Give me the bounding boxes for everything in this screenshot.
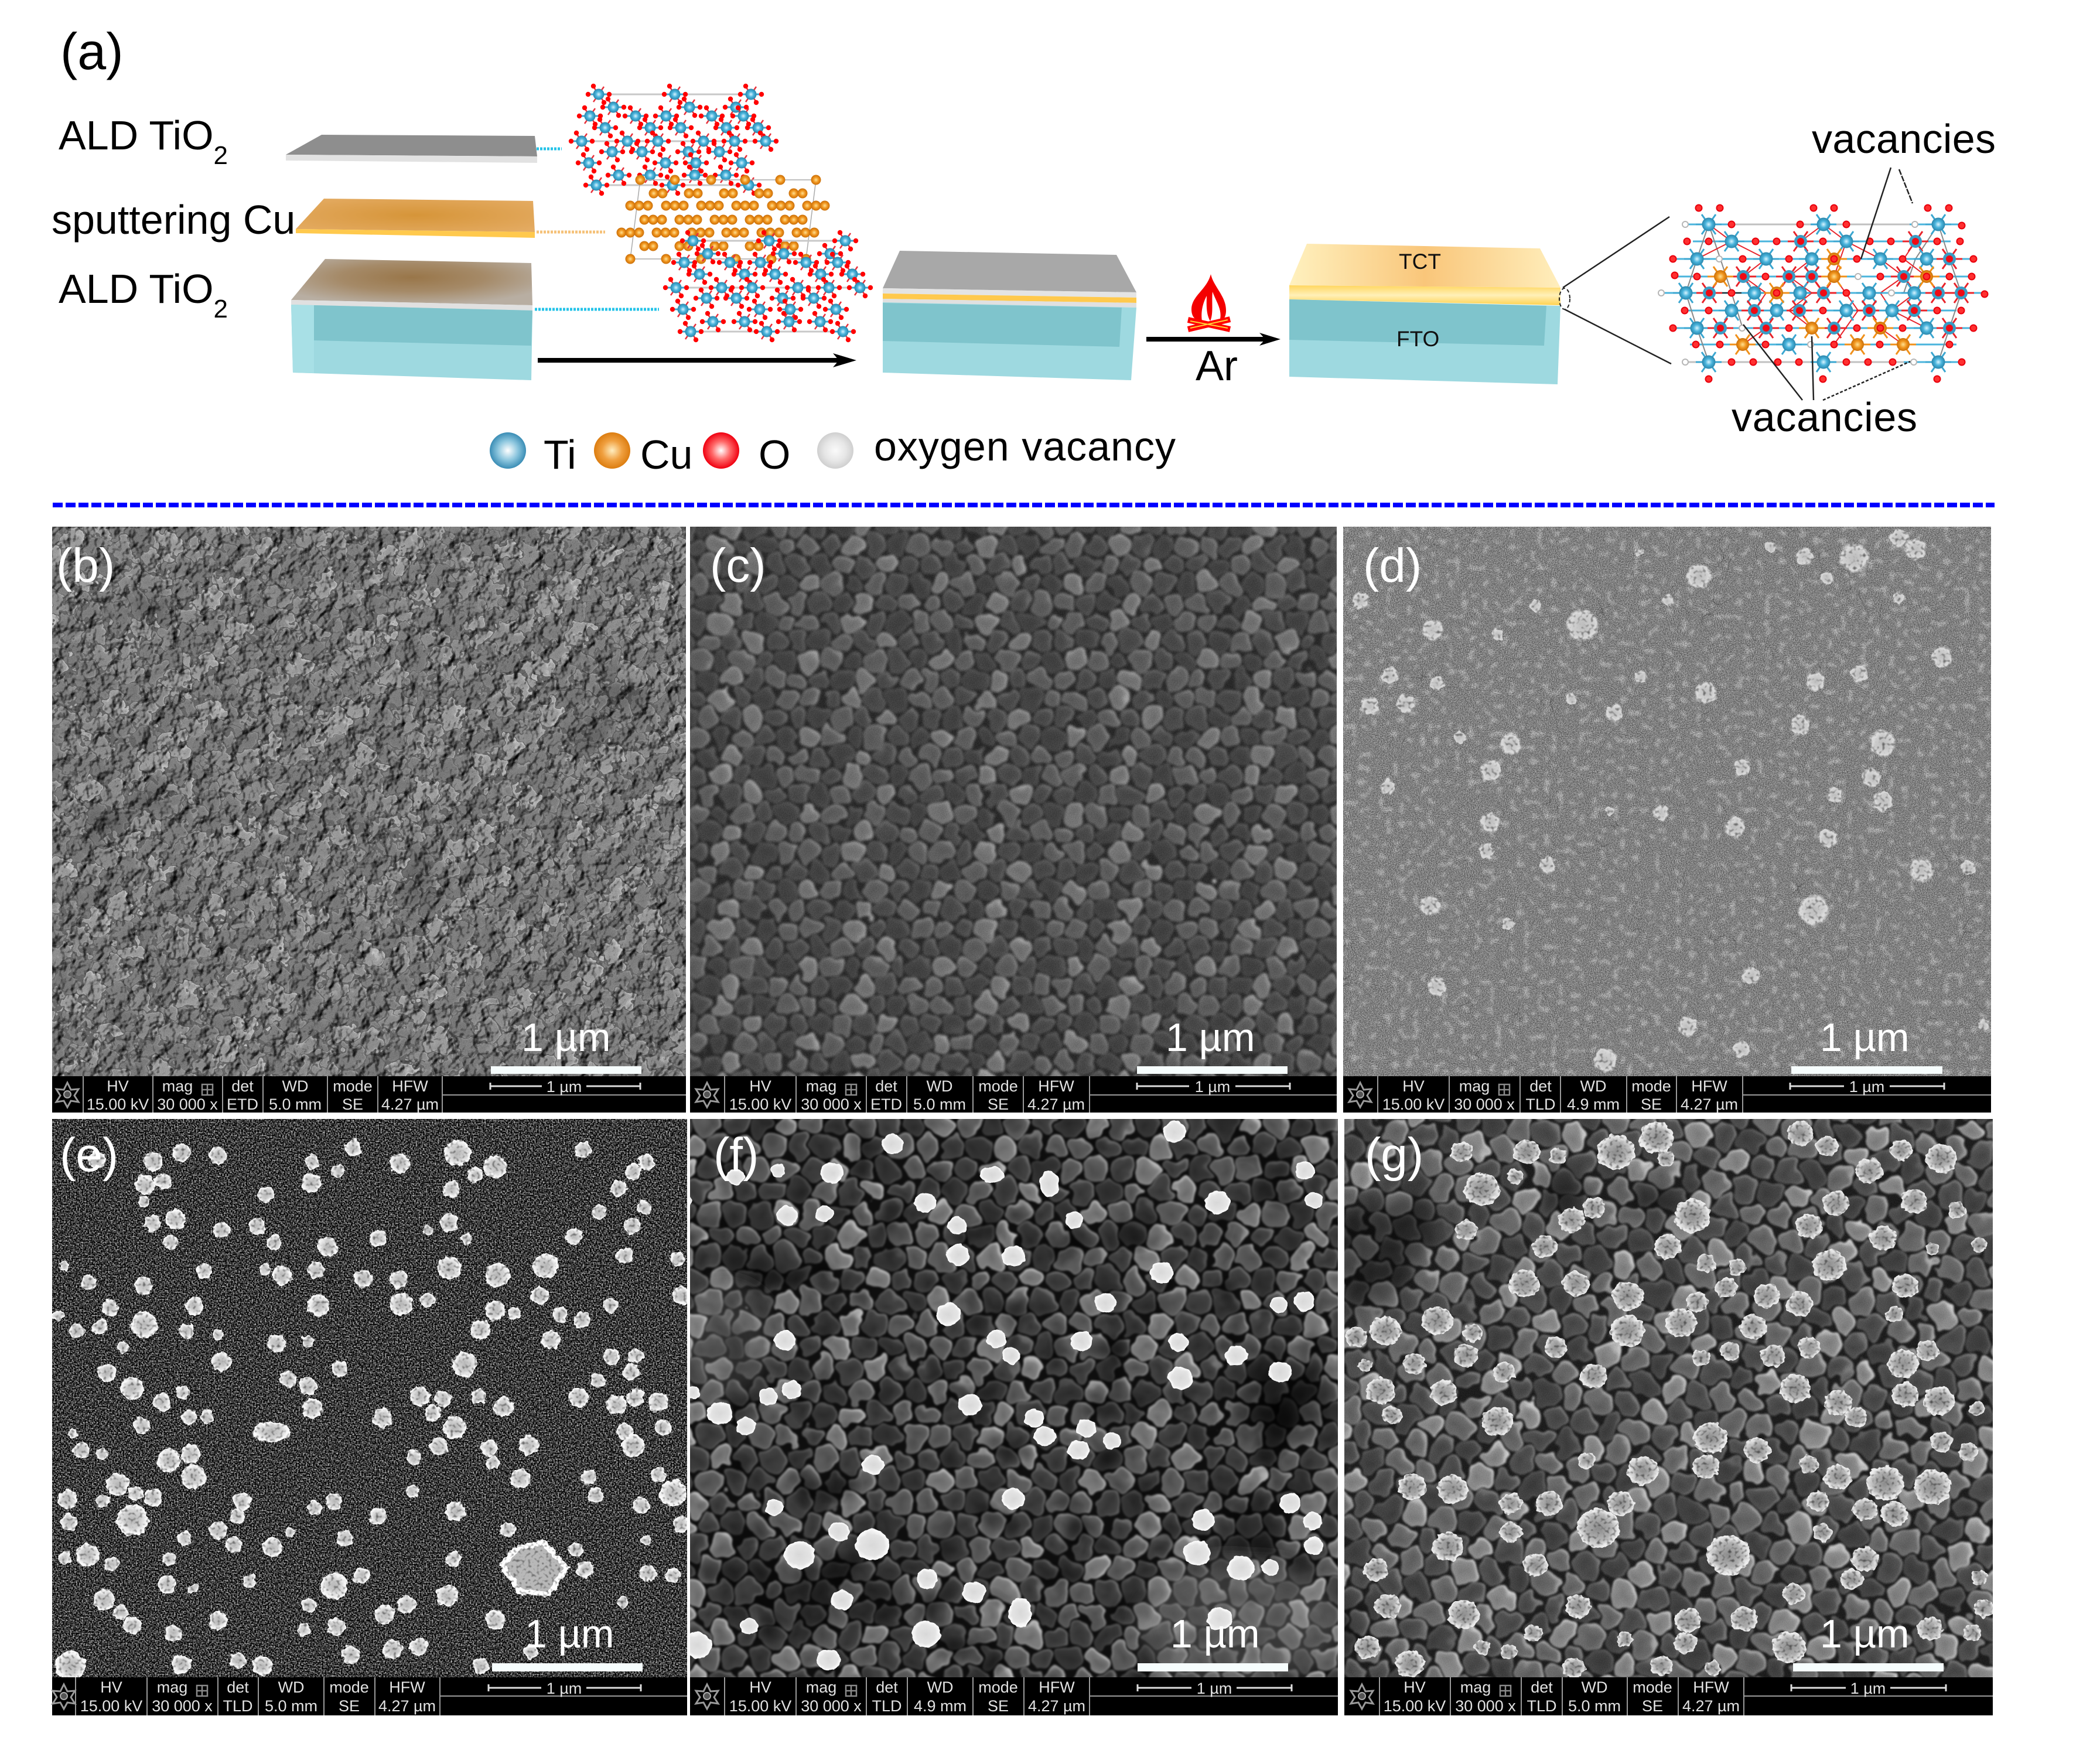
footer c: 4.27 µm (1027, 1096, 1085, 1113)
footer g: SE (1642, 1697, 1663, 1715)
footer b: SE (342, 1096, 363, 1113)
footer d: TLD (1525, 1096, 1556, 1113)
footer d: HFW (1691, 1077, 1727, 1095)
footer d: mode (1631, 1077, 1671, 1095)
footer f: 4.27 µm (1028, 1697, 1085, 1715)
footer d: HV (1402, 1077, 1425, 1095)
footer f: mag (806, 1678, 836, 1696)
panel: (e) SEM image (52, 1119, 691, 1715)
scale text f: 1 µm (1170, 1612, 1260, 1656)
icon: flame (Ar annealing) (1188, 274, 1230, 329)
arrow: annealing step (1146, 333, 1280, 346)
scale bar d (1791, 1066, 1942, 1074)
SEM texture e (52, 1119, 691, 1681)
footer c: 5.0 mm (913, 1096, 966, 1113)
footer f: SE (988, 1697, 1009, 1715)
footer d (1343, 1076, 1991, 1113)
footer b: det (231, 1077, 254, 1095)
footer d: SE (1641, 1096, 1662, 1113)
footer e: 1 µm (547, 1680, 582, 1697)
dotted connector: Cu to lattice (537, 231, 605, 233)
footer c: WD (927, 1077, 952, 1095)
stack layer: top TiO2 plate (286, 135, 537, 163)
footer b: HFW (392, 1077, 428, 1095)
SEM texture f (667, 1096, 1361, 1701)
scale text d: 1 µm (1820, 1015, 1910, 1060)
legend: oxygen vacancy label: oxygen vacancy (874, 424, 1176, 469)
footer b: mag (162, 1077, 193, 1095)
footer c: HFW (1038, 1077, 1074, 1095)
footer c: 30 000 x (801, 1096, 862, 1113)
SEM texture b (52, 527, 686, 1076)
label: top ALD TiO2 layer: ALD TiO (59, 112, 214, 158)
footer f (690, 1677, 1338, 1715)
footer f: 30 000 x (801, 1697, 862, 1715)
lattice bonds (1665, 224, 1986, 362)
stack layer: sputtered Cu plate (296, 199, 535, 238)
panel: (f) SEM image (667, 1096, 1361, 1715)
footer d: 4.27 µm (1681, 1096, 1738, 1113)
footer b: ETD (227, 1096, 258, 1113)
label (b): (b) (56, 539, 115, 592)
TCT/FTO device block (1289, 244, 1560, 384)
footer g: TLD (1527, 1697, 1557, 1715)
footer g: det (1531, 1678, 1553, 1696)
footer b: 30 000 x (157, 1096, 218, 1113)
footer c: 1 µm (1195, 1078, 1230, 1096)
footer e: SE (339, 1697, 360, 1715)
legend: oxygen vacancy ball (817, 432, 853, 469)
stacked film block (883, 251, 1136, 380)
SEM texture g (1321, 1096, 2016, 1701)
label: vacancies (top): vacancies (1812, 116, 1996, 162)
label: vacancies (bottom): vacancies (1732, 394, 1917, 440)
footer e: HV (100, 1678, 122, 1696)
lattice: TCT crystal with vacancies (1658, 205, 1988, 382)
label (c): (c) (710, 539, 766, 592)
label (e): (e) (60, 1128, 118, 1182)
lattice: Cu crystal (616, 175, 829, 264)
footer d: 15.00 kV (1382, 1096, 1445, 1113)
footer b: 5.0 mm (269, 1096, 322, 1113)
footer f: 4.9 mm (914, 1697, 967, 1715)
panel: (c) SEM image (690, 527, 1337, 1113)
footer d: 4.9 mm (1567, 1096, 1620, 1113)
footer d: det (1529, 1077, 1552, 1095)
oxygen atoms (1669, 205, 1988, 382)
legend: O label: O (759, 432, 790, 477)
panel: (d) SEM image (1343, 527, 1991, 1113)
footer d: 1 µm (1849, 1078, 1884, 1096)
footer c: SE (988, 1096, 1009, 1113)
footer f: HFW (1039, 1678, 1075, 1696)
footer e: TLD (223, 1697, 253, 1715)
scale bar c (1137, 1066, 1288, 1074)
legend: atom key (490, 424, 1176, 477)
label (g): (g) (1365, 1128, 1423, 1182)
footer g: 1 µm (1850, 1680, 1886, 1697)
label: bottom ALD TiO2 layer: 2 (214, 295, 228, 323)
footer c: mag (806, 1077, 836, 1095)
label: TCT: TCT (1399, 250, 1441, 274)
lattice: top TiO2 crystal (569, 84, 778, 196)
scale bar g (1793, 1663, 1944, 1671)
footer g: mode (1633, 1678, 1672, 1696)
footer f: 1 µm (1197, 1680, 1232, 1697)
footer e: 15.00 kV (80, 1697, 142, 1715)
footer e: HFW (389, 1678, 425, 1696)
footer g: mag (1460, 1678, 1491, 1696)
oxygen vacancies (1658, 221, 1918, 365)
SEM texture c (690, 527, 1337, 1076)
footer g: WD (1582, 1678, 1607, 1696)
footer b: HV (107, 1077, 129, 1095)
dotted connector: top TiO2 to lattice (537, 148, 562, 150)
titanium atoms (1673, 214, 1974, 372)
panel: (a) device fabrication schematic (52, 22, 1996, 477)
footer c: HV (749, 1077, 771, 1095)
footer g: 5.0 mm (1568, 1697, 1621, 1715)
panel: (g) SEM image (1321, 1096, 2016, 1715)
footer c: mode (978, 1077, 1018, 1095)
scale bar e (492, 1663, 643, 1671)
label: bottom ALD TiO2 layer: ALD TiO (59, 266, 214, 312)
lattice: bottom TiO2 crystal (663, 230, 873, 342)
stack layer: bottom TiO2 on FTO substrate (291, 259, 532, 380)
panel label (a): (a) (60, 22, 124, 80)
footer g: 30 000 x (1455, 1697, 1516, 1715)
footer f: mode (978, 1678, 1018, 1696)
legend: Ti label: Ti (544, 432, 576, 477)
footer c (690, 1076, 1337, 1113)
label: Ar: Ar (1196, 343, 1238, 390)
footer b: 15.00 kV (87, 1096, 149, 1113)
scale text g: 1 µm (1820, 1612, 1910, 1656)
panel: (b) SEM image (52, 527, 686, 1113)
footer d: WD (1580, 1077, 1606, 1095)
footer e: 4.27 µm (378, 1697, 436, 1715)
footer g: 15.00 kV (1384, 1697, 1446, 1715)
scale text c: 1 µm (1166, 1015, 1255, 1060)
footer c: ETD (870, 1096, 902, 1113)
footer e: det (227, 1678, 249, 1696)
scale bar b (491, 1066, 641, 1074)
dotted connector: bottom TiO2 to lattice (535, 308, 659, 311)
scale text b: 1 µm (521, 1015, 611, 1060)
footer g: HV (1404, 1678, 1426, 1696)
SEM texture d (1343, 527, 1991, 1076)
footer b: 1 µm (547, 1078, 582, 1096)
footer e: 5.0 mm (265, 1697, 317, 1715)
footer g: HFW (1693, 1678, 1729, 1696)
arrow: stacking step (538, 353, 856, 367)
scale text e: 1 µm (525, 1612, 614, 1656)
copper atoms (1708, 249, 1939, 354)
footer b: 4.27 µm (381, 1096, 439, 1113)
label (f): (f) (713, 1128, 759, 1182)
footer e: mode (329, 1678, 369, 1696)
footer g: 4.27 µm (1682, 1697, 1740, 1715)
scale bar f (1138, 1663, 1288, 1671)
footer f: 15.00 kV (729, 1697, 791, 1715)
footer e: 30 000 x (152, 1697, 213, 1715)
label: sputtering Cu: sputtering Cu (52, 197, 295, 243)
footer f: TLD (872, 1697, 902, 1715)
footer f: WD (927, 1678, 953, 1696)
legend: Ti ball (490, 432, 526, 469)
label: FTO: FTO (1396, 327, 1439, 351)
footer b: WD (282, 1077, 308, 1095)
footer b (52, 1076, 686, 1113)
footer f: det (876, 1678, 898, 1696)
leader lines: bottom vacancies (1743, 325, 1910, 400)
footer b: mode (333, 1077, 373, 1095)
label: top ALD TiO2 layer: 2 (214, 141, 228, 170)
legend: O ball (703, 432, 739, 469)
legend: Cu label: Cu (640, 432, 692, 477)
footer e: mag (157, 1678, 187, 1696)
footer c: 15.00 kV (729, 1096, 791, 1113)
footer c: det (875, 1077, 897, 1095)
footer e (52, 1677, 687, 1715)
label (d): (d) (1363, 539, 1422, 592)
leader lines: top vacancies (1861, 168, 1913, 259)
footer g (1344, 1677, 1993, 1715)
legend: Cu ball (594, 432, 630, 469)
callout: magnified spot and zoom lines (1559, 217, 1671, 364)
footer f: HV (749, 1678, 771, 1696)
footer d: mag (1459, 1077, 1490, 1095)
footer d: 30 000 x (1454, 1096, 1515, 1113)
footer e: WD (278, 1678, 304, 1696)
